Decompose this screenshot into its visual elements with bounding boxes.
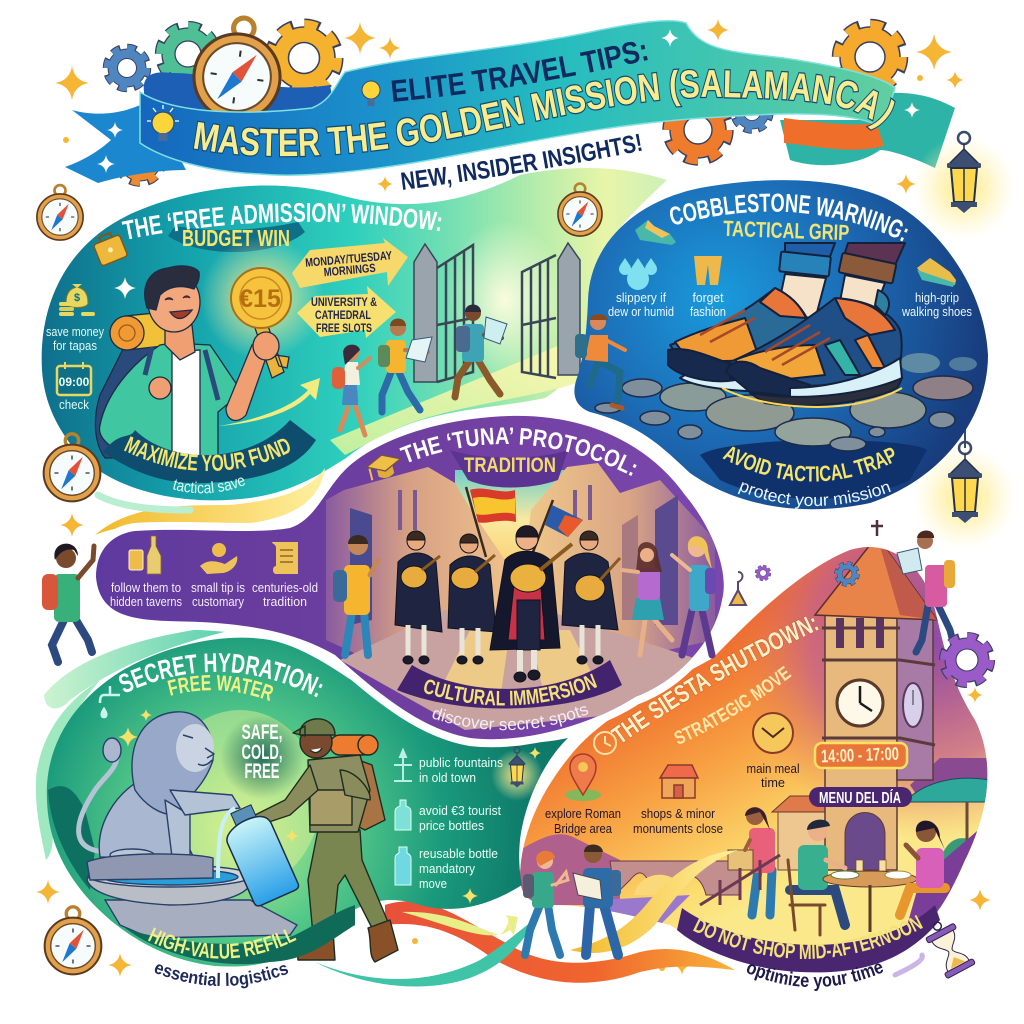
- icon: map pin: [565, 754, 601, 801]
- icon: small bottle: [395, 800, 411, 830]
- icon: clock small: [594, 732, 616, 754]
- hair: [145, 266, 199, 310]
- note: fountains: public fountains: [419, 755, 503, 770]
- flag: blue regional: [533, 500, 583, 552]
- lion tail: [79, 748, 118, 852]
- lantern mid right: [913, 442, 1017, 550]
- musician 2: [448, 534, 496, 664]
- lion features: [183, 735, 214, 765]
- note: main meal: main meal: [746, 761, 800, 776]
- decorative gears around the title: [107, 25, 902, 182]
- note: save money: [46, 324, 104, 353]
- glow through gate: [445, 220, 565, 380]
- note: save money: save money: [46, 324, 104, 339]
- ribbon sparkles: [97, 29, 920, 173]
- note: high-grip shoes: walking shoes: [901, 304, 972, 319]
- musician 1: [395, 531, 442, 664]
- left gate leaf: [437, 245, 473, 382]
- note: small tip: customary: [192, 594, 244, 609]
- lantern small: [491, 747, 543, 801]
- safe cold free glow: [220, 715, 304, 799]
- arrow: yellow bottom swoosh: [402, 912, 518, 935]
- banner: high-value refill: [125, 905, 355, 964]
- top right traveller with map: [897, 530, 955, 652]
- lion front leg: [165, 800, 190, 857]
- backpack: [95, 345, 165, 458]
- note: shops close: shops & minor: [641, 806, 716, 821]
- arrow: rising path: [218, 378, 320, 426]
- banner: do not shop: [677, 905, 940, 972]
- rear shoe midsole: [680, 372, 800, 392]
- forearm: [226, 345, 268, 420]
- lion statue: [79, 712, 240, 861]
- note: hidden taverns: [110, 580, 182, 609]
- river: [610, 895, 690, 923]
- t-shirt: [172, 350, 200, 458]
- wall windows: [400, 485, 590, 530]
- lion body: [99, 780, 195, 860]
- banner text: MAXIMIZE YOUR FUND: [124, 436, 290, 471]
- note: centuries-old: centuries-old: [252, 580, 318, 595]
- swoosh: gold into bridge: [570, 850, 738, 953]
- low house: [778, 812, 824, 870]
- ribbon left tail: [65, 100, 186, 183]
- torso: [308, 755, 370, 832]
- roof: [814, 547, 938, 621]
- banner text: HIGH-VALUE REFILL: [148, 928, 296, 959]
- swoosh: pale green left: [98, 495, 190, 510]
- note: slippery: dew or humid: [608, 304, 674, 319]
- note: check: check: [59, 397, 89, 412]
- left gate post: [414, 244, 437, 382]
- flag: Spain: [466, 487, 516, 557]
- lantern top right: [912, 132, 1016, 240]
- clock main: [837, 680, 883, 726]
- gate: [414, 243, 580, 382]
- note: reusable bottle: move: [419, 876, 447, 891]
- note: tourist bottles: avoid €3 tourist: [419, 803, 501, 818]
- icon: money bag and coins: [59, 284, 95, 316]
- sparkle near hero: [114, 277, 136, 299]
- note: centuries-old: tradition: [263, 594, 307, 609]
- cafe table: [823, 860, 917, 932]
- girl walker: [523, 851, 568, 955]
- street: [340, 610, 700, 730]
- note: tourist bottles: price bottles: [419, 818, 484, 833]
- soldier arm: [255, 765, 318, 825]
- tower body: [825, 615, 897, 870]
- swoosh: violet hourglass trail: [895, 955, 922, 975]
- rear shoe toe and sole: [668, 349, 735, 381]
- note: shops close: monuments close: [633, 821, 723, 836]
- note: reusable bottle: mandatory: [419, 861, 475, 876]
- cross on roof: [871, 520, 883, 536]
- coin value: €15: [239, 285, 281, 313]
- ribbon main band: [140, 21, 895, 175]
- blue leg: [785, 243, 835, 262]
- seated woman: [900, 821, 945, 915]
- bystander: blonde girl: [672, 536, 716, 655]
- lion hind paw: [110, 849, 154, 861]
- soldier hiker: [255, 719, 398, 962]
- musician 4: [562, 531, 620, 664]
- front shoe toe panel: [735, 345, 825, 382]
- panel 4 title: SECRET HYDRATION:: [118, 653, 323, 698]
- lion raised leg: [170, 790, 240, 815]
- icon: tall bottle: [395, 847, 411, 885]
- icon: fountain: [394, 750, 412, 781]
- title line 1: ELITE TRAVEL TIPS:: [392, 42, 648, 102]
- decorative small gears right: [756, 564, 990, 683]
- walking pair on bridge: [523, 844, 621, 955]
- swoosh: red orange bottom: [385, 901, 735, 983]
- right gate leaf: [522, 255, 556, 378]
- safe cold free: FREE: [244, 760, 280, 783]
- smile: [310, 748, 322, 753]
- icon: compass on title banner: [188, 12, 288, 126]
- caption: essential logistics: essential logistics: [154, 964, 288, 988]
- right buildings: [525, 463, 715, 660]
- hand on strap: [149, 377, 171, 399]
- sneakers on cobblestones: [668, 243, 905, 406]
- awning roof: [910, 758, 990, 800]
- front shoe upper: [730, 298, 902, 388]
- icon: scroll: [272, 542, 298, 574]
- fountain pedestal: [87, 854, 297, 938]
- cap: [293, 719, 335, 736]
- note: roman bridge: Bridge area: [554, 821, 613, 836]
- panel: tuna protocol: [96, 416, 724, 748]
- arch door: [845, 812, 885, 870]
- clock side: [903, 683, 923, 727]
- front shoe outsole: [750, 378, 902, 406]
- walker: man with map: [378, 318, 432, 412]
- sparkles on panel 4: [118, 709, 541, 904]
- note: reusable bottle: [419, 846, 498, 891]
- front shoe heel tab: [875, 290, 889, 315]
- bulb icon: lower: [147, 105, 179, 141]
- railing: [700, 855, 780, 905]
- lion mane: [132, 712, 213, 815]
- panel 5 title: THE SIESTA SHUTDOWN:: [610, 616, 820, 743]
- arch glow: [634, 875, 684, 895]
- swoosh: green left of hydration panel: [36, 680, 100, 860]
- icon: beer and bottle: [129, 536, 161, 574]
- compass centre top: [558, 184, 602, 236]
- panel 3 subtitle: TRADITION: [464, 454, 556, 477]
- walker: man at gate: [455, 304, 507, 397]
- woman with shopping box: [728, 807, 775, 915]
- icon: tap: [100, 686, 120, 717]
- banner: maximize your fund: [103, 420, 316, 483]
- title line 2: MASTER THE GOLDEN MISSION (SALAMANCA): [192, 68, 896, 158]
- panel: secret hydration: [46, 638, 568, 966]
- banner caption: protect your mission: [738, 482, 891, 509]
- tower mouldings: [822, 628, 935, 745]
- doors: [350, 508, 372, 625]
- lantern pole: [964, 425, 966, 448]
- ribbon right tail: [780, 93, 955, 168]
- cobblestones: [595, 353, 977, 451]
- street scene: [326, 463, 715, 730]
- panel 1 subtitle: BUDGET WIN: [182, 225, 290, 251]
- arrow tag: Monday Tuesday: [292, 238, 408, 288]
- compass bottom left: [45, 907, 101, 974]
- rear shoe collar: [760, 288, 806, 318]
- neck: [165, 325, 195, 360]
- tuna musicians: [395, 526, 620, 682]
- icon: graduation cap: [365, 451, 404, 482]
- subtitle: NEW, INSIDER INSIGHTS!: [401, 134, 642, 190]
- note: small tip: small tip is: [191, 580, 245, 595]
- front shoe stripes: [825, 340, 860, 375]
- tower side: [897, 615, 933, 780]
- icon: shop: [660, 765, 698, 798]
- swoosh: teal bottom: [315, 915, 540, 987]
- note: hidden taverns: hidden taverns: [110, 594, 182, 609]
- panel 3 subtitle ribbon: [450, 450, 568, 488]
- icon: tip in hand: [200, 543, 237, 574]
- banner text: AVOID TACTICAL TRAP: [722, 446, 894, 482]
- note: roman bridge: [545, 806, 621, 836]
- note: save money: for tapas: [53, 338, 97, 353]
- lion glow: [160, 710, 320, 890]
- swoosh: green under purple lobe: [44, 622, 265, 708]
- time badge: 14:00 - 17:00: [821, 744, 899, 766]
- icon: water drops: [619, 258, 657, 290]
- grip glow: [722, 388, 902, 407]
- right bushes: [940, 838, 974, 908]
- note: main meal: time: [761, 775, 785, 790]
- note: hidden taverns: follow them to: [111, 580, 181, 595]
- compass left middle: [44, 434, 100, 501]
- lion tail tip: [103, 738, 121, 762]
- banner text: CULTURAL IMMERSION: [424, 674, 598, 706]
- banner caption: discover secret spots: [432, 706, 588, 730]
- icon: yellow trousers: [694, 256, 722, 285]
- key stem: [254, 323, 289, 378]
- arm right: [340, 770, 370, 800]
- purple bottom right: [908, 830, 978, 924]
- gold coin key head: [231, 268, 291, 328]
- caption: optimize your time: optimize your time: [746, 964, 884, 991]
- note: roman bridge: explore Roman: [545, 806, 621, 821]
- road to gate: [330, 345, 585, 455]
- water stream: [218, 808, 235, 878]
- bystander: man with yellow shirt: [333, 535, 378, 655]
- icon: meal clock: [753, 713, 793, 753]
- bridge: [610, 861, 740, 895]
- umbrella: [905, 778, 990, 802]
- note: high-grip shoes: [901, 290, 972, 319]
- seated man: [788, 820, 845, 935]
- bulb icon: upper: [362, 81, 380, 106]
- panel 4 background: [47, 638, 568, 967]
- hourglass: [921, 915, 975, 979]
- ribbon orange fold: [784, 118, 884, 150]
- hand on key: [253, 332, 279, 360]
- panel 2 subtitle: TACTICAL GRIP: [723, 216, 850, 245]
- arrow tag: university and cathedral: FREE SLOTS: [316, 321, 372, 335]
- panel: cobblestone warning: [574, 180, 988, 510]
- icon: briefcase: [91, 230, 128, 266]
- panel 2 title: COBBLESTONE WARNING:: [670, 194, 908, 242]
- panel 5 subtitle: STRATEGIC MOVE: [674, 666, 792, 744]
- note: small tip: [191, 580, 245, 609]
- coin glow: [200, 236, 324, 360]
- menu badge: MENU DEL DÍA: [819, 788, 901, 807]
- panel 4 subtitle: FREE WATER: [167, 675, 274, 701]
- hero traveller with key: [95, 236, 324, 458]
- banner text: DO NOT SHOP MID-AFTERNOON: [693, 915, 923, 959]
- musician 3 lead: [490, 526, 572, 682]
- panel 5 background: [520, 547, 987, 970]
- small lantern hook: [730, 572, 746, 605]
- arrow tag: Monday Tuesday: MONDAY/TUESDAY: [305, 248, 393, 270]
- panel 2 background: [574, 180, 988, 509]
- compass left top: [37, 185, 83, 240]
- icon: calendar 09:00: 09:00: [59, 375, 90, 389]
- note: centuries-old: [252, 580, 318, 609]
- straps: [145, 347, 218, 400]
- head: [300, 726, 332, 758]
- panel 1 subtitle ribbon: [168, 222, 305, 252]
- menu badge: [809, 787, 912, 807]
- arrow tag: university and cathedral: UNIVERSITY &: [311, 295, 377, 309]
- note: high-grip shoes: high-grip: [915, 290, 959, 305]
- backpack: [345, 755, 385, 830]
- note: forget fashion: forget: [692, 290, 724, 305]
- sleeping roll: [125, 312, 172, 350]
- front shoe collar: [835, 298, 895, 335]
- lion face: [176, 724, 214, 772]
- ribbon inner curl: [144, 72, 335, 118]
- note: fountains: in old town: [419, 770, 476, 785]
- icon: calendar 09:00: [57, 362, 91, 395]
- banner caption: tactical save: [173, 478, 245, 494]
- left buildings: [326, 467, 505, 665]
- icon: yellow shoe right: [917, 258, 956, 287]
- tower windows: [840, 618, 880, 648]
- rock left: [48, 786, 95, 890]
- note: fountains: [419, 755, 503, 785]
- water bottle: [217, 800, 300, 907]
- icon: money bag and coins: $: [74, 292, 80, 304]
- eyes and smile: [165, 296, 192, 319]
- panel 1 background: [42, 168, 667, 500]
- title ribbon: [65, 16, 955, 224]
- waving hiker left: [42, 544, 94, 662]
- left hills: [520, 834, 620, 905]
- legs: [308, 830, 388, 935]
- note: reusable bottle: reusable bottle: [419, 846, 498, 861]
- slipping hiker: [575, 314, 625, 408]
- panel 1 title: THE ‘FREE ADMISSION’ WINDOW:: [122, 202, 442, 240]
- brown leg: [842, 243, 905, 272]
- banner: avoid tactical trap: [700, 440, 927, 499]
- note: forget fashion: [690, 290, 726, 319]
- head: [148, 272, 200, 332]
- boots: [298, 930, 335, 960]
- safe cold free: COLD,: [242, 741, 282, 764]
- front shoe midsole: [790, 358, 902, 400]
- panel: free admission window: [42, 168, 667, 500]
- safe cold free: SAFE,: [242, 721, 282, 744]
- note: forget fashion: fashion: [690, 304, 726, 319]
- scene: [520, 536, 990, 950]
- right gate post: [558, 243, 580, 375]
- arrow tag: Monday Tuesday: MORNINGS: [323, 261, 376, 279]
- icon: small shoe left: [635, 220, 676, 245]
- swoosh: gold ribbon left: [95, 468, 325, 535]
- man with map: [573, 844, 621, 955]
- banner: cultural immersion: [397, 660, 622, 709]
- arrow tag: university and cathedral: [297, 286, 396, 338]
- safe cold free: [242, 721, 282, 783]
- walker: girl: [332, 345, 370, 435]
- front shoe toe cap: [726, 362, 810, 398]
- note: slippery: slippery if: [616, 290, 666, 305]
- rear shoe upper: [670, 288, 808, 378]
- panel 3 background: [96, 416, 724, 739]
- panel 3 title: THE ‘TUNA’ PROTOCOL:: [399, 428, 637, 476]
- note: tourist bottles: [419, 803, 501, 833]
- rear shoe orange panel: [675, 318, 760, 362]
- arrow tag: university and cathedral: CATHEDRAL: [315, 308, 371, 322]
- bystander: girl purple top: [622, 542, 672, 655]
- note: shops close: [633, 806, 723, 836]
- sky: [455, 470, 564, 560]
- laces: [700, 310, 830, 365]
- note: main meal: [746, 761, 800, 790]
- panel: siesta shutdown: [520, 520, 988, 972]
- note: slippery: [608, 290, 674, 319]
- shirt: [99, 343, 242, 458]
- purple wash: [520, 547, 987, 970]
